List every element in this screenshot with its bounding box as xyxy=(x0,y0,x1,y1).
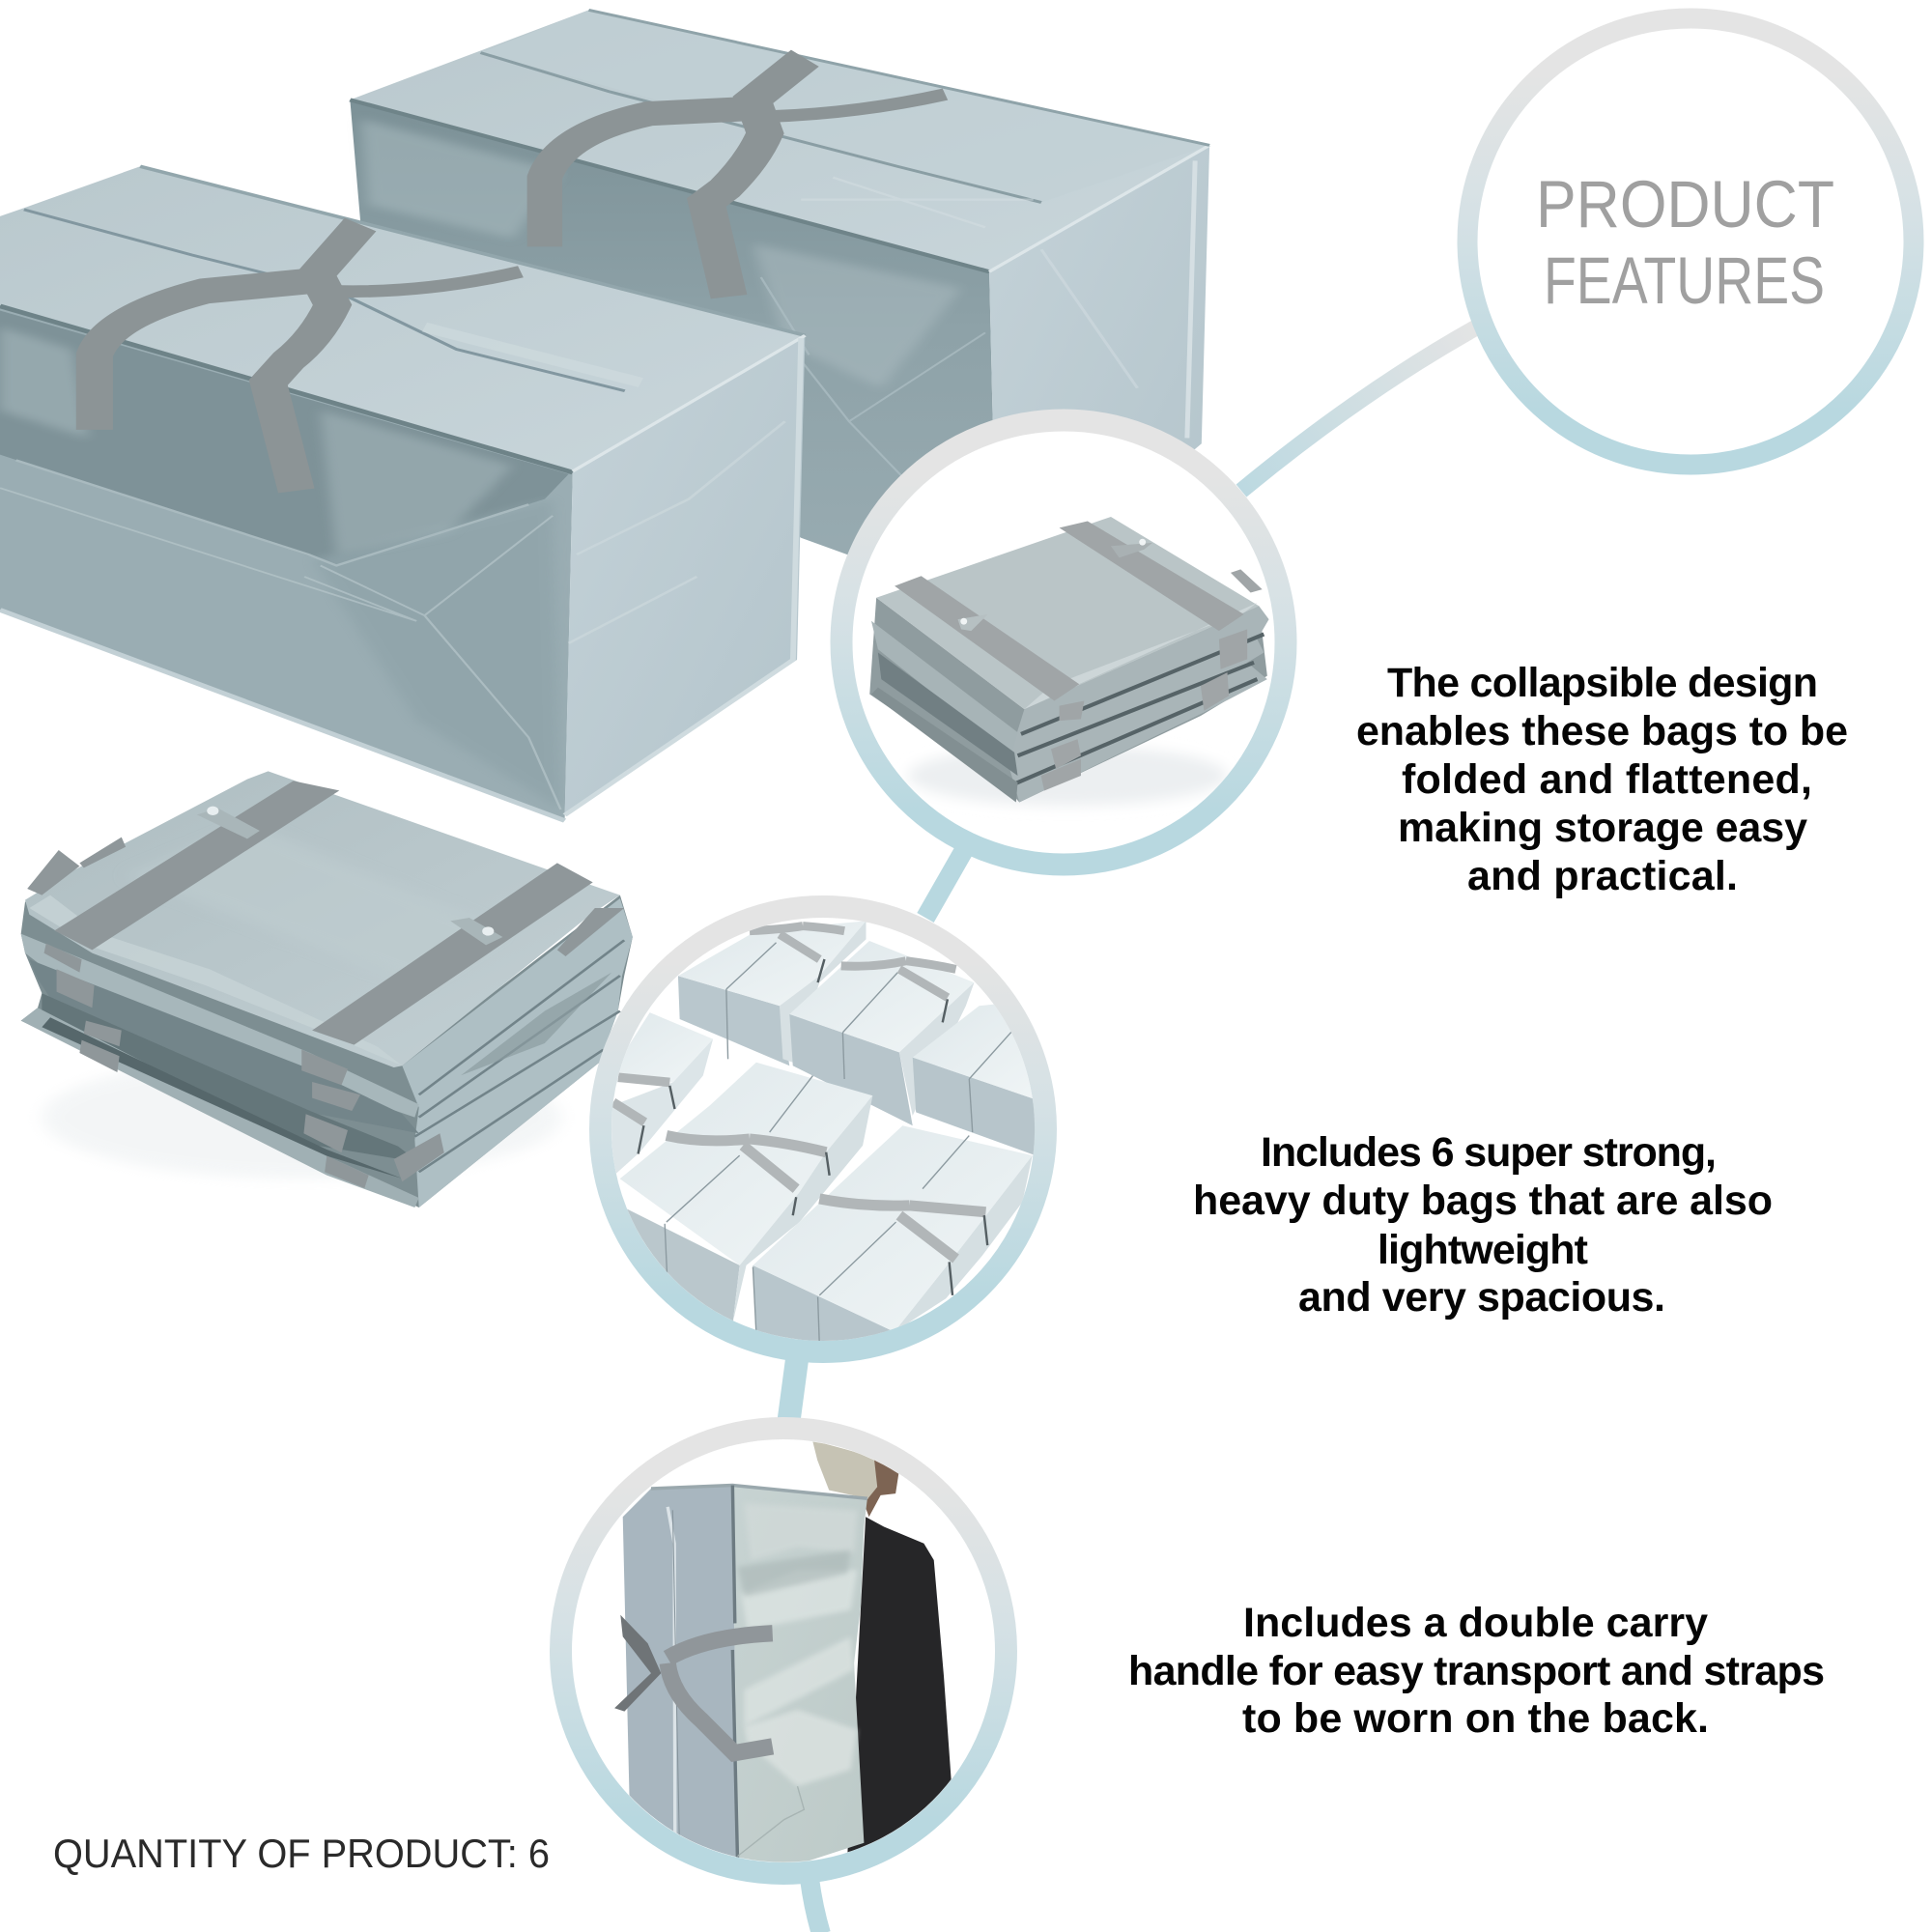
photo: collapsed bags xyxy=(869,517,1269,806)
photo: person carrying bag xyxy=(614,1440,952,1864)
connector: third circle to page bottom xyxy=(810,1879,821,1932)
carry straps xyxy=(614,1615,773,1753)
heading: PRODUCT xyxy=(1536,167,1834,242)
connector: second to third circle xyxy=(788,1352,798,1425)
photo: six filled bags xyxy=(603,921,1042,1349)
straps xyxy=(613,926,985,1259)
text: double carry handle: handle for easy transport and straps xyxy=(1128,1648,1825,1694)
panel: collapsible stack circle xyxy=(841,420,1286,865)
text: collapsible design: and practical. xyxy=(1467,853,1738,899)
straps on stack xyxy=(27,781,624,1188)
connector: first to second circle xyxy=(925,850,964,918)
text: heavy duty bags: heavy duty bags that are also xyxy=(1193,1178,1773,1224)
back bag handles xyxy=(545,58,945,297)
panel: carried on back circle xyxy=(560,1428,1007,1874)
strap buckles xyxy=(197,807,502,945)
back bag xyxy=(350,10,1209,615)
text: heavy duty bags: Includes 6 super strong, xyxy=(1261,1129,1717,1176)
text: collapsible design: making storage easy xyxy=(1398,805,1807,851)
text: collapsible design: enables these bags to be xyxy=(1356,708,1848,754)
text: double carry handle xyxy=(1128,1600,1825,1742)
text: double carry handle: to be worn on the back. xyxy=(1242,1695,1709,1742)
text: collapsible design: folded and flattened, xyxy=(1402,756,1812,803)
photo: folded bag stack xyxy=(21,771,633,1208)
stack layers xyxy=(21,895,633,1208)
panel: six bags circle xyxy=(601,906,1045,1352)
text: heavy duty bags: lightweight xyxy=(1378,1227,1588,1273)
photo: two large storage bags xyxy=(0,10,1209,821)
heading: FEATURES xyxy=(1544,243,1825,318)
carried bag xyxy=(623,1485,867,1864)
panel: product features heading circle xyxy=(1467,18,1914,465)
text: double carry handle: Includes a double carry xyxy=(1243,1600,1708,1646)
seams xyxy=(665,943,1012,1345)
top folded face xyxy=(25,771,620,1067)
text: heavy duty bags xyxy=(1193,1129,1773,1321)
text: quantity of product: QUANTITY OF PRODUCT: 6 xyxy=(53,1831,550,1876)
text: collapsible design xyxy=(1356,660,1848,899)
straps xyxy=(895,521,1263,790)
text: heavy duty bags: and very spacious. xyxy=(1298,1274,1665,1321)
connector: features to first circle xyxy=(1241,327,1478,491)
person xyxy=(812,1440,952,1862)
front bag handles xyxy=(95,224,521,491)
heading xyxy=(1536,167,1834,318)
front bag xyxy=(0,166,805,821)
text: collapsible design: The collapsible design xyxy=(1387,660,1818,706)
